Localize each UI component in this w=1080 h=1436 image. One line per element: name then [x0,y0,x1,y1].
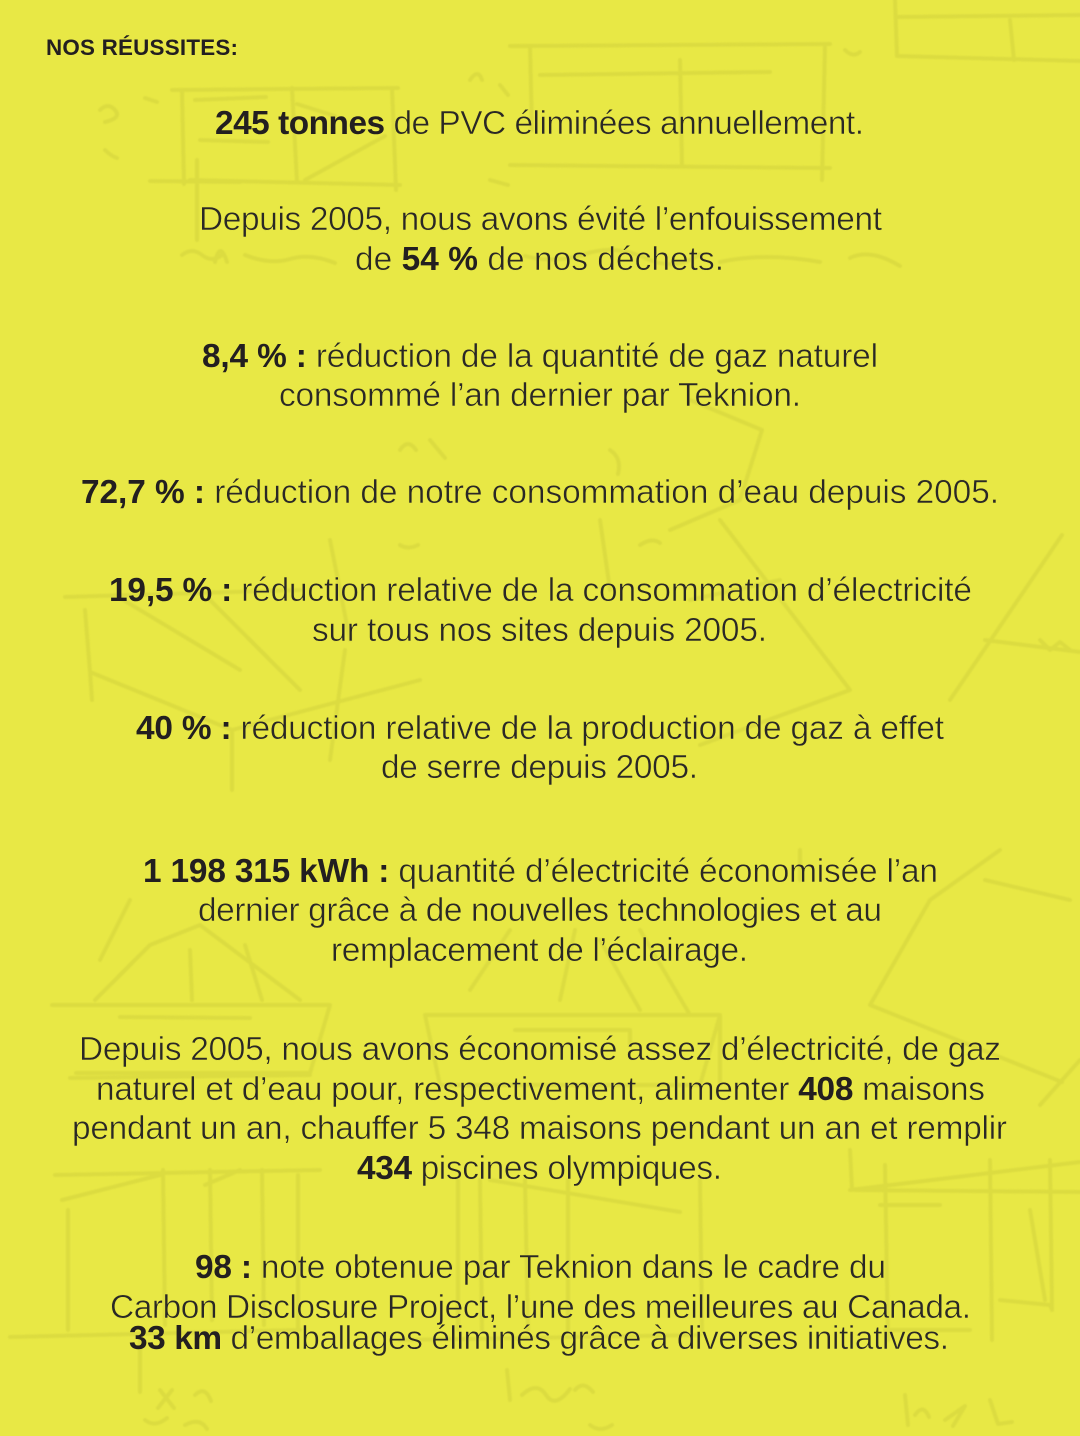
stat: 40 % greenhouse gas [136,710,945,786]
stat: 54 % waste diverted: Depuis 2005, nous avons évité l’enfouissement [199,201,883,238]
stat: 8,4 % natural gas [202,338,878,414]
stat: 40 % greenhouse gas: de serre depuis 2005. [381,749,698,786]
stat: 19,5 % electricity: sur tous nos sites depuis 2005. [312,612,767,649]
stat: 72,7 % water: 72,7 % : réduction de notre consommation d’eau depuis 2005. [81,474,999,511]
stat: 1 198 315 kWh [143,853,938,969]
stat: 54 % waste diverted: de 54 % de nos déchets. [355,241,724,278]
stat: homes and pools equivalents [72,1031,1007,1187]
stat: 98 Carbon Disclosure Project: 98 : note obtenue par Teknion dans le cadre du [195,1249,886,1286]
stat: 33 km packaging: 33 km d’emballages éliminés grâce à diverses initiatives. [129,1320,949,1357]
stat: 19,5 % electricity [109,572,972,649]
stat: 54 % waste diverted [199,201,883,278]
stat: 19,5 % electricity: 19,5 % : réduction relative de la consommation d’électricité [109,572,972,609]
stat: 245 tonnes: 245 tonnes de PVC éliminées annuellement. [215,105,864,142]
stat: 98 Carbon Disclosure Project [110,1249,971,1326]
stat: 1 198 315 kWh: remplacement de l’éclairage. [331,932,748,969]
stat: homes and pools equivalents: naturel et d’eau pour, respectivement, alimenter 408 maisons [96,1071,985,1108]
stat: 8,4 % natural gas: 8,4 % : réduction de la quantité de gaz naturel [202,338,878,375]
stat: homes and pools equivalents: Depuis 2005, nous avons économisé assez d’électricité, de gaz [79,1031,1001,1068]
stat: homes and pools equivalents: 434 piscines olympiques. [357,1150,722,1187]
stat: 1 198 315 kWh: 1 198 315 kWh : quantité d’électricité économisée l’an [143,853,938,890]
stat: 98 Carbon Disclosure Project: Carbon Disclosure Project, l’une des meilleures au Canada. [110,1289,971,1326]
stat: homes and pools equivalents: pendant un an, chauffer 5 348 maisons pendant un an et remplir [72,1110,1007,1147]
stat: 40 % greenhouse gas: 40 % : réduction relative de la production de gaz à effet [136,710,945,747]
stat: 8,4 % natural gas: consommé l’an dernier par Teknion. [279,377,801,414]
stat: 1 198 315 kWh: dernier grâce à de nouvelles technologies et au [198,892,882,929]
heading: NOS RÉUSSITES: [46,35,238,60]
